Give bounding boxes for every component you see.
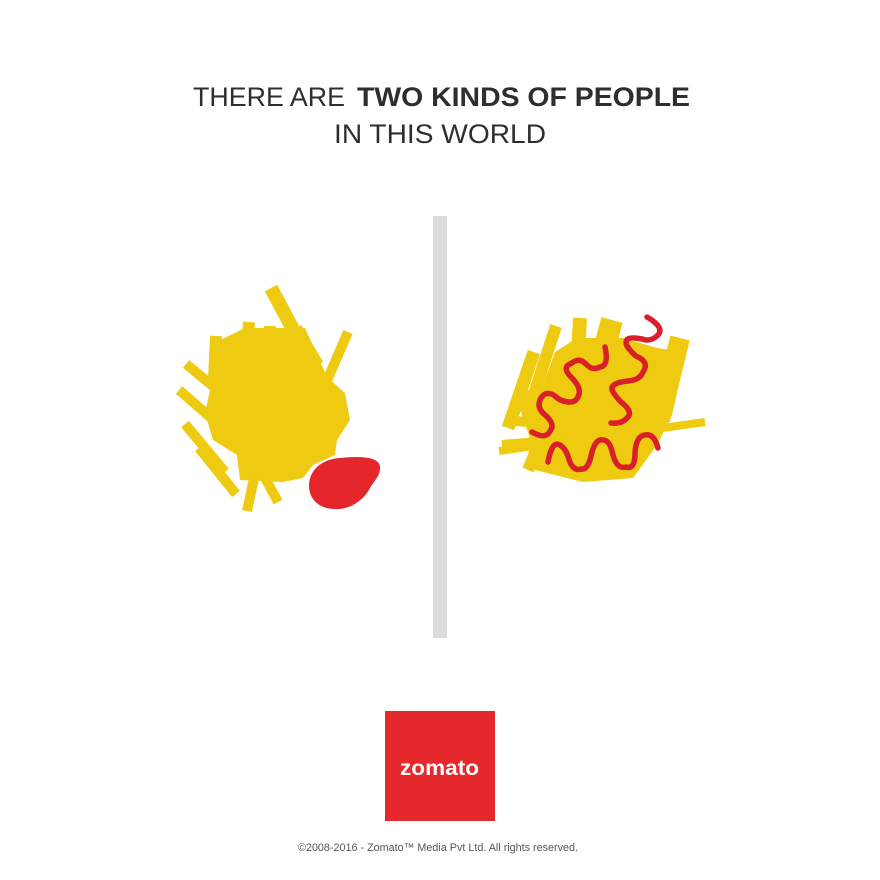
copyright footer: ©2008-2016 - Zomato™ Media Pvt Ltd. All rights reserved.	[298, 842, 578, 854]
title: THERE ARE	[193, 82, 345, 112]
zomato logo	[385, 711, 495, 821]
zomato logo: zomato	[400, 757, 479, 780]
fries pile, right	[499, 318, 705, 482]
illustration: fries with ketchup on the side	[179, 288, 380, 511]
divider between the two kinds of people	[433, 216, 447, 638]
title: TWO KINDS OF PEOPLE	[357, 82, 690, 112]
title	[193, 82, 690, 149]
fries pile, left	[179, 288, 350, 511]
ketchup blob	[309, 457, 380, 509]
title: IN THIS WORLD	[334, 119, 546, 149]
illustration: fries with ketchup drizzled on top	[499, 317, 705, 482]
ketchup squiggles	[532, 317, 660, 469]
